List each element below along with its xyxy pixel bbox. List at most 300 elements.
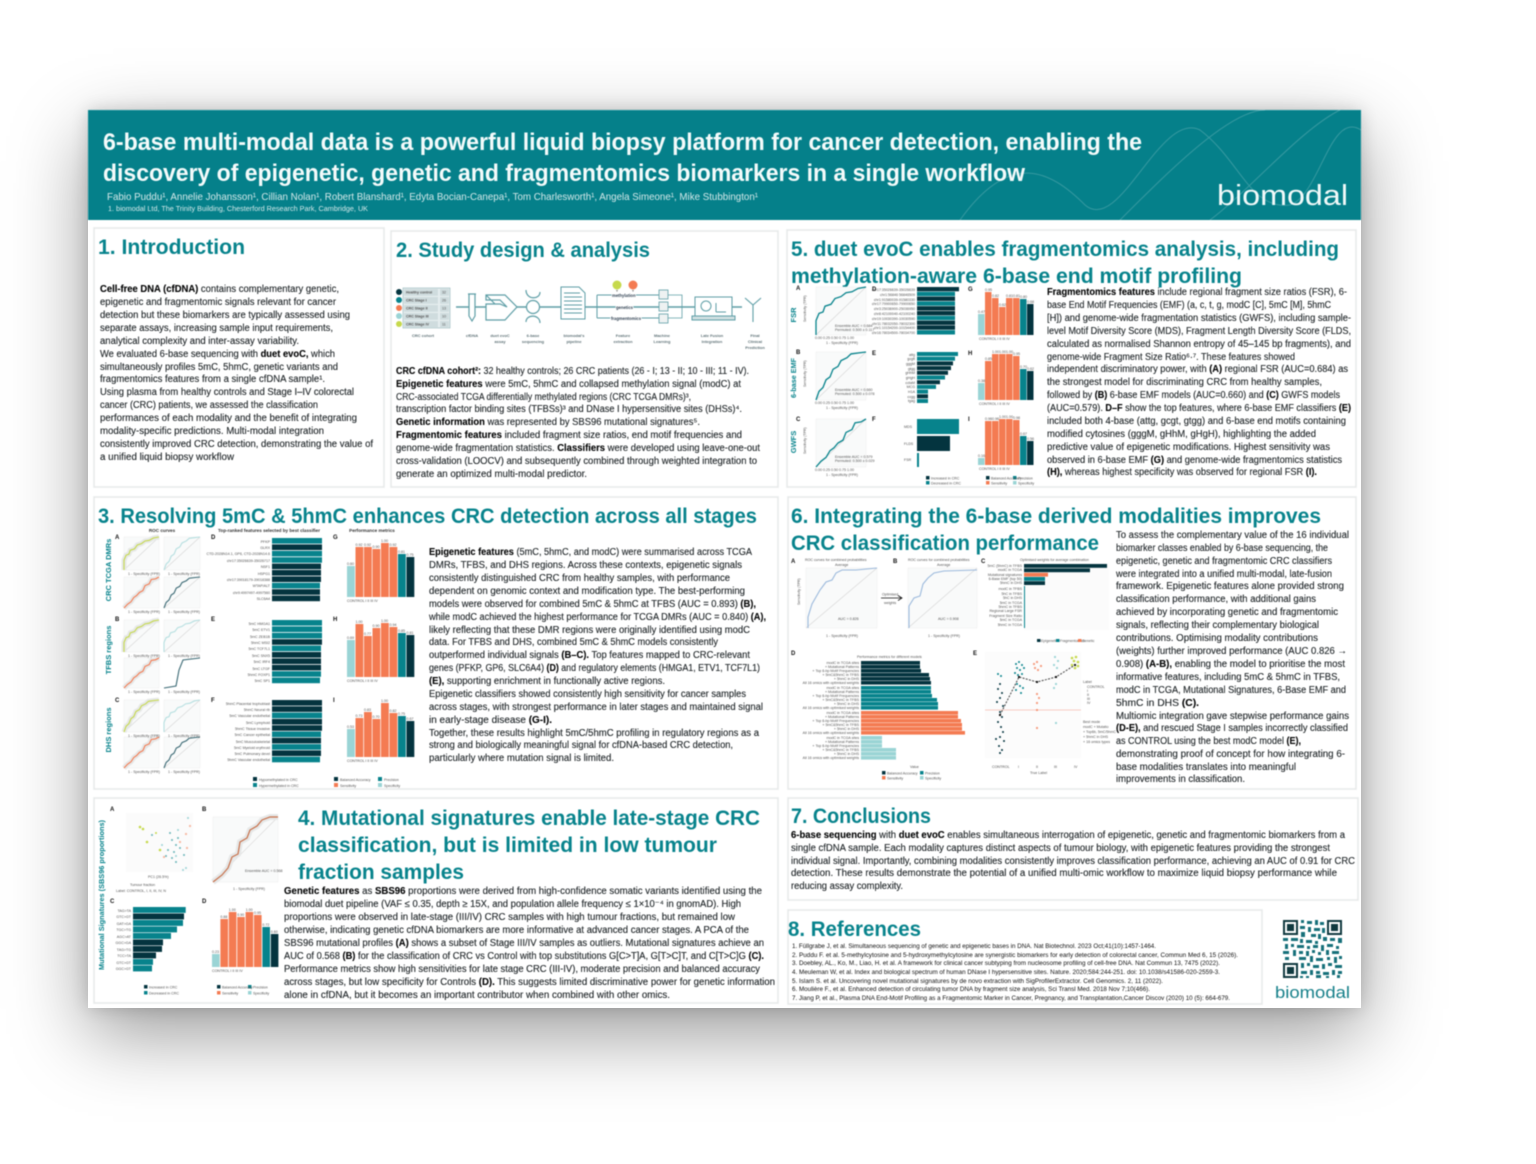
roc curves A B C: Sensitivity (TPR) xyxy=(803,295,807,322)
feature bars C: C xyxy=(110,899,115,905)
feature bars D: chr16:78034500-78034700 xyxy=(872,331,915,335)
feature bars E: 5mC HMGA1 xyxy=(249,622,270,626)
weights bar chart: 5hC in DHS xyxy=(1003,596,1023,600)
roc grid: 1 - Specificity (FPR) xyxy=(128,610,160,614)
performance bars H xyxy=(333,617,414,683)
heading: integration: CRC classification performance xyxy=(791,531,1099,555)
roc grid: A xyxy=(115,535,120,541)
workflow labels: pipeline xyxy=(566,339,582,344)
workflow diagram xyxy=(396,280,765,350)
pca scatter A: A xyxy=(110,807,115,813)
heading: fragmentomics xyxy=(791,237,1339,288)
weights bar chart: Regional Large FSR xyxy=(989,609,1022,613)
feature bars E: cctaM xyxy=(905,381,915,385)
model metrics bar chart: All 16 omics with optimised weights xyxy=(803,731,859,735)
performance bars I: 0.83 xyxy=(364,708,371,712)
feature bars E: 5mC ZEB1B xyxy=(250,635,271,639)
performance bars H: 0.85 xyxy=(398,629,405,633)
feature extraction: fragmentomics xyxy=(611,316,642,321)
feature bars D: PFKP xyxy=(261,540,271,544)
performance bars I: 0.53 xyxy=(347,725,354,729)
performance bars G: 0.60 xyxy=(347,562,354,566)
roc grid: 1 - Specificity (FPR) xyxy=(168,610,200,614)
feature bars D: D xyxy=(872,287,877,293)
performance bars I: 0.73 xyxy=(356,714,362,718)
text: introduction: simultaneously profiles 5mC, 5hmC, genetic variants and xyxy=(100,362,338,373)
feature bars D: chr1:56846 56846509 xyxy=(880,293,915,297)
workflow labels: biomodal's xyxy=(564,333,585,338)
row labels: FSR xyxy=(789,307,798,322)
text: integration: as CONTROL using the best modC model (E), xyxy=(1116,736,1301,747)
feature bars D: chr9:4997497-4997560 xyxy=(233,591,270,595)
text: fragmentomics: modified cytosines (gggM, gHhM, gHgH), highlighting the added xyxy=(1047,429,1316,440)
feature extraction: genetics xyxy=(616,305,634,310)
model metrics bar chart: All 16 omics with optimised weights xyxy=(803,681,859,685)
feature bars D: chr17:39018179-39018388 xyxy=(227,578,270,582)
heading: integration: 6. Integrating the 6-base derived modalities improves xyxy=(791,504,1321,528)
performance bars G: 0.81 xyxy=(1013,294,1020,298)
pca scatter A: Tumour fraction xyxy=(130,883,155,887)
legend: metrics: Sensitivity xyxy=(340,784,356,788)
performance bars G: 0.82 xyxy=(992,294,999,298)
feature bars F xyxy=(211,698,322,762)
performance bars G: 0.81 xyxy=(1006,294,1013,298)
legend: metrics: Balanced Accuracy xyxy=(340,778,371,782)
text: epigenetic: genes (PFKP, GP6, SLC6A4) (D) and regulatory elements (HMGA1, ETV1, TCF7L1) xyxy=(429,663,760,674)
legend: metrics: Specificity xyxy=(384,784,400,788)
text: epigenetic: strong and biologically meaningful signal for cfDNA-based CRC detection, xyxy=(429,740,733,751)
text: integration: classification performance, with additional gains xyxy=(1116,594,1316,605)
stage scatter chart: IV xyxy=(1087,701,1091,705)
workflow labels: Feature xyxy=(616,333,631,338)
model metrics bar chart: modC in TCGA sites xyxy=(826,711,859,715)
text: study design: cross-validation (LOOCV) and subsequently combined through weighted integration to xyxy=(396,456,757,467)
text: epigenetic: across stages, with strongest performance in later stages and maintained signal xyxy=(429,702,763,713)
text: epigenetic: likely reflecting that these DMR regions were originally identified using modC xyxy=(429,625,750,636)
performance bars H: 0.62 xyxy=(1027,367,1034,371)
performance bars H: 0.70 xyxy=(1020,365,1027,369)
roc A: ROC curves for combined probabilities xyxy=(805,558,867,562)
text: study design: Fragmentomic features included fragment size ratios, end motif frequencies and xyxy=(396,430,742,441)
performance bars H: 0.94 xyxy=(390,623,396,627)
feature bars D: NSF1 xyxy=(261,565,270,569)
panel: introduction xyxy=(94,228,384,487)
text: integration: informative features, including 5mC & 5hmC in TFBS, xyxy=(1116,672,1340,683)
performance bars I: 0.75 xyxy=(398,712,405,716)
text: fragmentomics: the strongest model for discriminating CRC from healthy samples, xyxy=(1047,377,1322,388)
text: integration: 5hmC in DHS (C). xyxy=(1116,698,1199,709)
feature bars C: TGC>TG xyxy=(116,928,131,932)
stage scatter chart: + 5hmC in DHS xyxy=(1083,735,1109,739)
performance bars G xyxy=(968,287,1034,341)
model metrics bar chart: + 5hmC in DHS xyxy=(834,677,860,681)
feature bars F: 5mC Pulmonary devel xyxy=(235,752,270,756)
text: mutational signatures: Performance metrics show high sensitivities for late stage CRC (III-IV), moderate precision and balanced accuracy xyxy=(284,964,760,975)
legend: metrics: Specificity xyxy=(1018,482,1034,486)
feature bars E: 5mC TCF7L1 xyxy=(248,647,270,651)
roc B: Average xyxy=(937,563,950,567)
logo: biomodal footer: biomodal xyxy=(1275,984,1350,1002)
arrow: optimised weights xyxy=(881,592,902,605)
weights bar chart: 5hmC in TCGA xyxy=(998,623,1023,627)
model metrics bar chart: + 5hmC in DHS xyxy=(834,727,860,731)
model metrics bar chart: Sensitivity xyxy=(887,776,903,780)
stage scatter chart: True Label xyxy=(1030,771,1047,775)
roc A xyxy=(791,558,877,638)
roc curves A B C: 1 - Specificity (FPR) xyxy=(826,341,858,345)
model metrics bar chart: modC in TCGA sites xyxy=(826,686,859,690)
feature bars E: 5hmC MSI2 xyxy=(251,641,270,645)
weights bar chart: C xyxy=(981,559,986,565)
model metrics bar chart: + Top 6-bp Motif Frequencies xyxy=(812,669,859,673)
performance bars D: 0.90 xyxy=(237,913,244,917)
title xyxy=(103,129,1142,187)
feature bars D: chr8:42100040-42100240 xyxy=(874,312,915,316)
heading: references: 8. References xyxy=(788,917,921,941)
text: introduction: performances of each modality and the benefit of integrating xyxy=(100,413,357,424)
feature bars E: 5hmC FOXP1 xyxy=(248,673,270,677)
text: study design: Genetic information was represented by SBS96 mutational signatures⁵. xyxy=(396,417,700,428)
performance bars I: 0.67 xyxy=(406,717,414,721)
weights bar chart xyxy=(981,558,1109,643)
roc curves A B C: Ensemble AUC = 0.579 xyxy=(835,455,872,459)
text: epigenetic: Epigenetic classifiers showed consistently high sensitivity for cancer samples xyxy=(429,689,746,700)
weights bar chart: 5mC in TCGA xyxy=(1000,618,1023,622)
panel: mutational signatures xyxy=(94,798,778,1003)
icon: assay xyxy=(486,295,517,320)
roc grid: 1 - Specificity (FPR) xyxy=(128,770,160,774)
feature bars E: tgag xyxy=(908,399,915,403)
roc grid: B xyxy=(115,617,120,623)
feature bars D: WTAP/ALT xyxy=(253,584,271,588)
reference list: 6. Moulière F., et al. Enhanced detection of circulating tumor DNA by fragment size analysis, Sci Transl Med. 2018 Nov 7;10(466). xyxy=(792,986,1150,993)
model metrics bar chart: + 5mC&5hmC in TFBS xyxy=(822,673,860,677)
cohort table: CRC Stage II xyxy=(406,306,428,310)
text: integration: 0.908) (A-B), enabling the model to prioritise the most xyxy=(1116,659,1345,670)
workflow labels: Machine xyxy=(654,333,671,338)
text: study design: Epigenetic features were 5mC, 5hmC and collapsed methylation signal (modC) at xyxy=(396,379,741,390)
row labels: TFBS regions xyxy=(104,626,113,674)
model metrics bar chart: + 5mC&5hmC in TFBS xyxy=(822,748,860,752)
roc grid: 1 - Specificity (FPR) xyxy=(128,572,160,576)
feature bars E: attg xyxy=(909,353,915,357)
workflow labels: Integration xyxy=(702,339,723,344)
text: conclusions xyxy=(791,830,1355,892)
feature bars C: TAG>TG xyxy=(117,948,131,952)
performance bars H: 1.00 xyxy=(999,350,1006,354)
text: integration: (D-E), and rescued Stage I samples incorrectly classified xyxy=(1116,723,1348,734)
text: introduction: Cell-free DNA (cfDNA) contains complementary genetic, xyxy=(100,284,339,295)
performance bars D: 0.72 xyxy=(262,923,269,927)
model metrics bar chart: modC in TCGA sites xyxy=(826,661,859,665)
performance bars G: 0.62 xyxy=(999,303,1006,307)
roc curve B: Ensemble AUC = 0.568 xyxy=(245,869,282,873)
feature bars E: gggM xyxy=(906,362,915,366)
roc grid: 1 - Specificity (FPR) xyxy=(128,690,160,694)
text: integration: epigenetic, genetic and fragmentomic CRC classifiers xyxy=(1116,556,1332,567)
text: introduction: a unified liquid biopsy workflow xyxy=(100,452,235,463)
feature bars E: ccgg xyxy=(907,395,915,399)
heading: fragmentomics: methylation-aware 6-base end motif profiling xyxy=(791,264,1242,288)
text: mutational signatures: Genetic features as SBS96 proportions were derived from high-confidence somatic variants identified using the xyxy=(284,886,762,897)
vertical label: Mutational Signatures (SBS96 proportions) xyxy=(97,820,106,970)
text: introduction: analytical complexity and inter-assay variability. xyxy=(100,336,299,347)
performance bars D: 0.23 xyxy=(212,950,219,954)
weights bar chart: Optimised weights for average combination xyxy=(1020,558,1089,562)
performance bars G: CONTROL I II III IV xyxy=(979,337,1010,341)
performance bars I xyxy=(333,698,414,763)
performance bars H: 1.00 xyxy=(1006,350,1013,354)
model metrics bar chart: + Top 6-bp Motif Frequencies xyxy=(812,719,859,723)
performance bars H: 1.00 xyxy=(992,350,999,354)
icon: laptop xyxy=(692,297,735,320)
text: epigenetic xyxy=(428,547,766,764)
text: conclusions: detection. These results demonstrate the potential of a unified multi-omic workflow to maximize liquid biopsy performance while xyxy=(791,868,1337,879)
reference list: 7. Jiang P, et al., Plasma DNA End-Motif Profiling as a Fragmentomic Marker in Cancer, Pregnancy, and Transplantation,Cancer Discov (2020) 10 (5): 664-679. xyxy=(792,995,1230,1002)
heading: mutational signatures xyxy=(298,806,760,884)
performance bars G: CONTROL I II III IV xyxy=(347,599,378,603)
feature bars C xyxy=(110,899,186,996)
feature bars C: GTC>GT xyxy=(116,915,132,919)
text: mutational signatures: biomodal duet pipeline (VAF ≤ 0.35, depth ≥ 15X, and population allele frequency ≤ 1×10⁻⁴ in gnomAD). High xyxy=(284,899,741,910)
performance bars I: 1.00 xyxy=(381,699,388,703)
performance bars H: CONTROL I II III IV xyxy=(979,402,1010,406)
arrow: optimised weights: weights xyxy=(884,601,896,605)
feature bars E: 5mC SP1 xyxy=(255,679,270,683)
performance bars G xyxy=(333,535,414,603)
feature bars F: 5hmC Placental trophoblast xyxy=(226,702,270,706)
roc curves A B C: Permuted: 0.500 ± 0.078 xyxy=(835,392,875,396)
heading: integration xyxy=(791,504,1321,555)
performance bars G: 0.47 xyxy=(978,310,985,314)
roc curves A B C: 1 - Specificity (FPR) xyxy=(826,473,858,477)
feature bars E: 5mC IRF4 xyxy=(254,660,270,664)
heading: fragmentomics: 5. duet evoC enables fragmentomics analysis, including xyxy=(791,237,1339,261)
cohort table: 26 xyxy=(442,298,446,302)
icon: document xyxy=(561,287,585,319)
feature bars D: SLC6A4 xyxy=(257,597,270,601)
weights bar chart: Epigenetic xyxy=(1041,639,1058,643)
workflow labels: duet evoC xyxy=(490,333,510,338)
text: introduction: fragmentomics features from a single cfDNA sample¹. xyxy=(100,374,325,385)
performance bars H: 0.77 xyxy=(364,632,371,636)
roc grid: C xyxy=(115,698,120,704)
heading: mutational signatures: 4. Mutational signatures enable late-stage CRC xyxy=(298,806,760,830)
text: epigenetic: Epigenetic features (5mC, 5hmC, and modC) were summarised across TCGA xyxy=(429,547,753,558)
heading: mutational signatures: classification, but is limited in low tumour xyxy=(298,833,718,857)
row labels: GWFS xyxy=(789,431,798,453)
row labels xyxy=(104,539,113,753)
stage scatter chart: + 16 omics types xyxy=(1083,740,1110,744)
text: mutational signatures: AUC of 0.568 (B) for the classification of CRC vs Control with top substitutions G[C>T]A, G[T>C]T, and C[T>C]G (C). xyxy=(284,951,764,962)
model metrics bar chart: + Top 6-bp Motif Frequencies xyxy=(812,744,859,748)
text: epigenetic: Together, these results highlight 5mC/5hmC profiling in regulatory regions as a xyxy=(429,728,760,739)
cohort table: CRC Stage III xyxy=(406,314,429,318)
text: study design: CRC cfDNA cohort²: 32 healthy controls; 26 CRC patients (26 - I; 13 - II; 10 - III; 11 - IV). xyxy=(396,366,749,377)
performance bars H: 0.81 xyxy=(406,631,414,635)
text: introduction: consistently improved CRC detection, demonstrating the value of xyxy=(100,439,373,450)
workflow labels xyxy=(412,333,765,350)
workflow labels: Prediction xyxy=(745,345,765,350)
legend: metrics xyxy=(986,476,1034,486)
feature bars E: gtgg xyxy=(908,367,915,371)
workflow labels: Clinical xyxy=(748,339,762,344)
legend: direction xyxy=(253,777,299,788)
performance bars H: 0.69 xyxy=(347,636,354,640)
text: fragmentomics: level Motif Diversity Score (MDS), Fragment Length Diversity Score (FLDS, xyxy=(1047,326,1351,337)
weights bar chart: 6-Base EMF (top 50) xyxy=(989,577,1022,581)
feature bars F: 5mC Vascular endothelial xyxy=(229,714,270,718)
arrow: optimised weights: Optimised xyxy=(882,592,898,596)
model metrics bar chart: + Top 6-bp Motif Frequencies xyxy=(812,694,859,698)
authors: Fabio Puddu¹, Annelie Johansson¹, Cillian Nolan¹, Robert Blanshard¹, Edyta Bocian-Canepa¹, Tom Charlesworth¹, Angela Simeone¹, Mike Stubbington¹ xyxy=(107,191,758,203)
performance bars I: 0.70 xyxy=(372,715,380,719)
roc grid: 1 - Specificity (FPR) xyxy=(168,770,200,774)
feature bars E: 5mC LTGF xyxy=(252,667,271,671)
feature bars F: FSR xyxy=(904,458,912,462)
panel: epigenetic xyxy=(94,497,778,789)
feature extraction xyxy=(597,280,660,321)
feature bars D: chr17:35026639-35026639 xyxy=(872,288,915,292)
text: fragmentomics: genome-wide Fragment Size Ratio⁶·⁷. These features showed xyxy=(1047,352,1295,363)
roc curves A B C xyxy=(796,286,875,477)
text: fragmentomics: Fragmentomics features include regional fragment size ratios (FSR), 6- xyxy=(1047,287,1347,298)
model metrics bar chart: + Mutational Patterns xyxy=(825,715,859,719)
panel: integration xyxy=(788,497,1356,789)
header banner xyxy=(88,110,1361,220)
feature bars E: gcgtt xyxy=(907,357,915,361)
roc grid: 1 - Specificity (FPR) xyxy=(168,690,200,694)
roc A: Average xyxy=(835,563,848,567)
feature bars D: HSPG1 xyxy=(258,572,270,576)
roc A: AUC = 0.826 xyxy=(838,617,859,621)
model metrics bar chart: + 5hmC in DHS xyxy=(834,702,860,706)
feature bars D: chr19:10030390-10030590 xyxy=(872,317,915,321)
feature bars D: D xyxy=(211,535,216,541)
performance bars D: 0.95 xyxy=(254,911,261,915)
performance bars I: 0.96 xyxy=(985,417,992,421)
model metrics bar chart: + Mutational Patterns xyxy=(825,690,859,694)
icon: prediction fork xyxy=(745,298,761,322)
performance bars G: 0.92 xyxy=(356,543,362,547)
model metrics bar chart: Value xyxy=(910,765,919,769)
text: mutational signatures: alone in cfDNA, but it becomes an important contributor when combined with other omics. xyxy=(284,990,670,1001)
text: fragmentomics: observed in 6-base EMF (G) and genome-wide fragmentomics statistics xyxy=(1047,455,1342,466)
feature bars C: Increased in CRC xyxy=(149,986,178,990)
text: mutational signatures: proportions were observed in late-stage (III/IV) CRC samples with high tumour fractions, but remained low xyxy=(284,912,736,923)
feature bars F: 5hmC Tissue invasive xyxy=(235,727,270,731)
performance bars G: 0.68 xyxy=(1027,300,1034,304)
feature bars F: F xyxy=(872,417,876,423)
performance bars D: D xyxy=(202,899,207,905)
text: mutational signatures: SBS96 mutational profiles (A) shows a subset of Stage III/IV samples as outliers. Mutational signatures achieve an xyxy=(284,938,764,949)
text: integration: biomarker classes enabled by 6-base sequencing, the xyxy=(1116,543,1328,554)
text: introduction xyxy=(100,284,373,463)
heading: conclusions: 7. Conclusions xyxy=(791,804,931,828)
performance bars H: 1.00 xyxy=(356,620,362,624)
text: epigenetic: data. For TFBS and DHS, combined 5mC & 5hmC models consistently xyxy=(429,637,718,648)
performance bars I: I xyxy=(968,417,970,423)
workflow labels: Final xyxy=(750,333,760,338)
feature bars D: chr17:79900650-79900650 xyxy=(872,302,915,306)
feature bars C: GGC>GA xyxy=(116,941,132,945)
performance bars D: Specificity xyxy=(253,992,269,996)
performance bars H: 0.95 xyxy=(1013,352,1020,356)
model metrics bar chart: D xyxy=(791,651,796,657)
text: conclusions: single cfDNA sample. Each modality captures distinct aspects of tumour biology, with epigenetic features providing the strongest xyxy=(791,843,1330,854)
performance bars I: 0.98 xyxy=(1013,416,1020,420)
title: 6-base multi-modal data is a powerful liquid biopsy platform for cancer detection, enabling the xyxy=(103,129,1142,156)
text: study design: generate an optimized multi-modal predictor. xyxy=(396,469,587,480)
weights bar chart: 5mC in TCGA xyxy=(1000,601,1023,605)
performance bars G: 0.92 xyxy=(364,543,371,547)
performance bars H: 0.90 xyxy=(372,624,380,628)
performance bars H: H xyxy=(333,617,337,623)
model metrics bar chart: + Mutational Patterns xyxy=(825,665,859,669)
text: integration: Multiomic integration gave stepwise performance gains xyxy=(1116,711,1349,722)
feature bars E: gHhM xyxy=(905,371,915,375)
roc B: AUC = 0.908 xyxy=(938,617,959,621)
text: conclusions: 6-base sequencing with duet evoC enables simultaneous interrogation of epigenetic, genetic and fragmentomic biomarkers from a xyxy=(791,830,1346,841)
workflow labels: assay xyxy=(494,339,506,344)
legend: feature direction xyxy=(926,476,961,486)
reference list: 2. Puddu F. et al. 5-methylcytosine and 5-hydroxymethylcytosine are synergistic biomarkers for early detection of colorectal cancer, Commun Med 6, 15 (2026). xyxy=(792,952,1238,959)
roc curve B xyxy=(202,807,282,891)
performance bars G: 1.00 xyxy=(381,539,388,543)
weights bar chart: 5mC (5hmC) in TFBS xyxy=(988,564,1023,568)
performance bars H xyxy=(968,350,1034,406)
text: integration: signals, reflecting their complementary biological xyxy=(1116,620,1319,631)
roc B: B xyxy=(893,559,898,565)
text: study design xyxy=(396,366,760,480)
feature bars F: 5mC Myeloid erythroid xyxy=(234,746,270,750)
text: fragmentomics xyxy=(1047,287,1351,478)
performance bars I: I xyxy=(333,698,335,704)
text: fragmentomics: calculated as normalised Shannon entropy of 45–145 bp fragments), and xyxy=(1047,339,1351,350)
stage scatter chart: Best mode xyxy=(1083,720,1100,724)
heading: epigenetic: 3. Resolving 5mC & 5hmC enhances CRC detection across all stages xyxy=(98,504,757,528)
roc curves A B C: C xyxy=(796,417,801,423)
text: mutational signatures: otherwise, indicating genetic cfDNA biomarkers are more informative at advanced cancer stages. A PCA of the xyxy=(284,925,749,936)
feature bars F: MDS xyxy=(904,425,913,429)
feature bars C: TCC>TA xyxy=(117,954,132,958)
feature bars E: MCG xyxy=(907,385,915,389)
legend: direction: Hypomethylated in CRC xyxy=(259,778,298,782)
workflow labels: cfDNA xyxy=(466,333,478,338)
roc A: A xyxy=(791,559,796,565)
feature bars D: CTD-2028N14.1, GP6, CTD-2028N14.6 xyxy=(206,552,270,556)
feature bars D xyxy=(872,287,959,335)
performance bars I: CONTROL I II III IV xyxy=(347,759,378,763)
roc curves A B C: Sensitivity (TPR) xyxy=(803,427,807,454)
panel: references xyxy=(788,910,1262,1004)
legend: direction: Hypermethylated in CRC xyxy=(259,784,299,788)
feature bars E: H1A xyxy=(908,390,916,394)
text: epigenetic: consistently distinguished CRC from healthy samples, with performance xyxy=(429,573,730,584)
workflow labels: 6-base xyxy=(527,333,540,338)
pca scatter A: PC1 (26.5%) xyxy=(148,875,169,879)
roc grid: 1 - Specificity (FPR) xyxy=(168,734,200,738)
text: introduction: Using plasma from healthy controls and Stage I–IV colorectal xyxy=(100,387,354,398)
performance bars D: 0.60 xyxy=(271,930,278,934)
stage scatter chart: CONTROL xyxy=(992,765,1010,769)
text: integration: modC in TCGA, Mutational Signatures, 6-Base EMF and xyxy=(1116,685,1346,696)
performance bars G: 0.80 xyxy=(1020,295,1027,299)
roc curves A B C: Ensemble AUC = 0.660 xyxy=(835,388,872,392)
roc curves A B C: 0.00 0.25 0.50 0.75 1.00 xyxy=(815,401,854,405)
feature bars C: GTC>GT xyxy=(116,961,132,965)
text: mutational signatures xyxy=(284,886,775,1001)
